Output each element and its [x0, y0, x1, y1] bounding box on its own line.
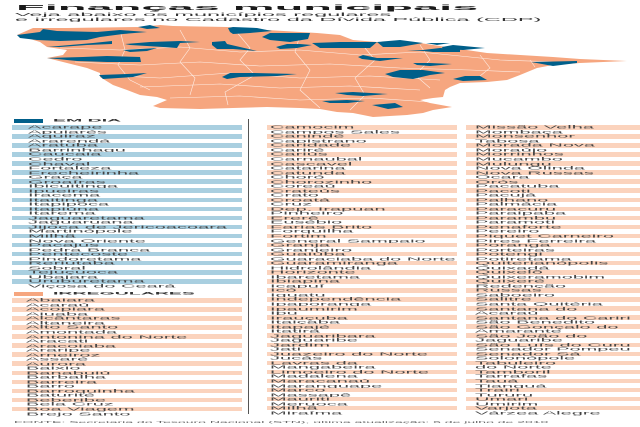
list: irregular municipalities, column 3: Piquet Carneiro — [475, 234, 614, 238]
list: irregular municipalities, column 2: Chorozinho — [270, 179, 372, 184]
list: irregular municipalities, column 2: Itatira — [270, 329, 320, 334]
list: irregular municipalities, column 3: Tururu — [475, 392, 533, 397]
list: irregular municipalities, column 2: Independência — [270, 297, 401, 302]
list: irregular municipalities, column 3: Nova Olinda — [475, 166, 585, 170]
list: irregular municipalities, column 3: Russas — [475, 288, 542, 293]
list: municipalities up to date: Jaguaretama — [28, 215, 145, 220]
list: irregular municipalities, column 2: Camocim — [270, 125, 354, 130]
list: irregular municipalities, column 1: Baixio — [26, 366, 80, 371]
list: irregular municipalities, column 3: Senador Pompeu — [475, 347, 631, 352]
list: irregular municipalities, column 2: Fortim — [270, 234, 327, 238]
list: irregular municipalities, column 2: Hidrolândia — [270, 265, 371, 270]
list: irregular municipalities, column 3: Morada Nova — [475, 143, 595, 148]
list: municipalities up to date: Caucaia — [28, 152, 101, 157]
list: irregular municipalities, column 3: Moraújo — [475, 148, 547, 152]
list: irregular municipalities, column 2: Milhã — [270, 406, 318, 411]
list: irregular municipalities, column 3: Quiterianópolis — [475, 261, 608, 266]
list: municipalities up to date: Jijoca de Jericoacoara — [28, 225, 227, 229]
list: irregular municipalities, column 2: Farias Brito — [270, 225, 372, 229]
list: municipalities up to date: Reriutaba — [28, 261, 115, 266]
title: Finanças municipais — [16, 3, 478, 11]
list: irregular municipalities, column 3: Nova Russas — [475, 170, 594, 175]
list: municipalities up to date: Frecheirinha — [28, 170, 139, 175]
list: irregular municipalities, column 1: Antonina do Norte — [26, 334, 187, 339]
list: municipalities up to date: Pindoretama — [28, 256, 141, 261]
list: irregular municipalities, column 3: Quixadá — [475, 265, 550, 270]
list: irregular municipalities, column 2: Ipaumirim — [270, 306, 358, 311]
list: municipalities up to date: Ipueiras — [28, 188, 99, 193]
list: irregular municipalities, column 2: Jardim — [270, 342, 330, 347]
list: irregular municipalities, column 3: Morrinhos — [475, 152, 564, 157]
list: irregular municipalities, column 2: Juazeiro do Norte — [270, 351, 428, 356]
list: irregular municipalities, column 1: Altaneira — [26, 321, 105, 325]
list: irregular municipalities, column 2: Jaguaribe — [270, 338, 358, 343]
list: irregular municipalities, column 3: Mombaça — [475, 129, 563, 134]
list: irregular municipalities, column 1: Bela Cruz — [26, 402, 114, 407]
list: irregular municipalities, column 1: Acaraú — [26, 302, 89, 307]
list: irregular municipalities, column 2: Carnaubal — [270, 157, 362, 161]
list: irregular municipalities, column 2: Forquilha — [270, 229, 353, 234]
list: irregular municipalities, column 1: Acopiara — [26, 307, 105, 312]
list: municipalities up to date: Graça — [28, 175, 82, 180]
list: municipalities up to date: Viçosa do Ceará — [28, 283, 176, 288]
list: irregular municipalities, column 2: Icó — [270, 288, 297, 293]
list: irregular municipalities, column 2: Croatá — [270, 197, 330, 202]
list: irregular municipalities, column 2: Cruz — [270, 202, 312, 207]
list: irregular municipalities, column 2: Meruoca — [270, 401, 348, 406]
list: irregular municipalities, column 2: Jucás — [270, 356, 322, 361]
list: irregular municipalities, column 1: Brejo Santo — [26, 411, 131, 416]
list: irregular municipalities, column 3: Santa Quitéria — [475, 302, 603, 306]
list: irregular municipalities, column 3: Redenção — [475, 283, 566, 288]
list: irregular municipalities, column 1: Boa Viagem — [26, 407, 135, 411]
list: irregular municipalities, column 1: Aurora — [26, 361, 86, 366]
list: irregular municipalities, column 1: Barreira — [26, 379, 97, 384]
map: municipalities up to date — [17, 25, 577, 109]
list: irregular municipalities, column 1: Aracoiaba — [26, 343, 116, 348]
list: irregular municipalities, column 2: Campos Sales — [270, 129, 400, 134]
list: irregular municipalities, column 3: Solonópole — [475, 356, 575, 361]
list: irregular municipalities, column 3: Pacatuba — [475, 184, 560, 189]
list: irregular municipalities, column 3: Tabosa — [475, 138, 540, 143]
list: irregular municipalities, column 2: Massapê — [270, 392, 351, 397]
list: municipalities up to date: Pentecoste — [28, 252, 128, 257]
list: municipalities up to date: Fortaleza — [28, 166, 111, 170]
legend: em dia: EM DIA — [53, 119, 121, 122]
list: irregular municipalities, column 3: Pacoti — [475, 188, 531, 193]
list: irregular municipalities, column 3: Pires Ferreira — [475, 238, 596, 243]
list: municipalities up to date: Itapiúna — [28, 206, 99, 211]
list: irregular municipalities, column 2: Cariré — [270, 148, 324, 152]
list: municipalities up to date: Cedro — [28, 157, 82, 161]
subtitle: Veja abaixo os municípios regulares — [15, 12, 391, 17]
list: irregular municipalities, column 3: Paracuru — [475, 206, 556, 211]
list: irregular municipalities, column 1: Alcântaras — [26, 316, 120, 321]
list: municipalities up to date: Itapipoca — [28, 202, 109, 207]
list: municipalities up to date: Ibicuitinga — [28, 184, 118, 189]
list: municipalities up to date: Pacajus — [28, 243, 99, 247]
list: irregular municipalities, column 3: Potiretama — [475, 256, 572, 261]
list: irregular municipalities, column 3: Paramoti — [475, 220, 555, 225]
list: irregular municipalities, column 3: Tianguá — [475, 383, 547, 388]
list: irregular municipalities, column 3: Tabuleiro — [475, 360, 556, 365]
list: irregular municipalities, column 2: Pinheiro — [270, 211, 343, 216]
list: municipalities up to date — [12, 125, 242, 288]
list: irregular municipalities, column 2: Ibaretama — [270, 274, 360, 279]
list: irregular municipalities, column 2: Catunda — [270, 170, 346, 175]
list: irregular municipalities, column 3: Pereiro — [475, 229, 539, 234]
list: municipalities up to date: Iracema — [28, 193, 100, 198]
list: municipalities up to date: Chaval — [28, 161, 90, 166]
list: irregular municipalities, column 3: Salitre — [475, 297, 532, 302]
list: irregular municipalities, column 3: Quixeramobim — [475, 274, 605, 279]
list: irregular municipalities, column 3: Penaforte — [475, 225, 562, 229]
list: irregular municipalities, column 3: Tauá — [475, 379, 518, 383]
list: municipalities up to date: Tejuçuoca — [28, 270, 118, 275]
list: irregular municipalities, column 2: Crateús — [270, 188, 340, 193]
list: irregular municipalities, column 1: Abaiara — [26, 298, 95, 303]
list: irregular municipalities, column 2: Cascavel — [270, 161, 352, 166]
list: irregular municipalities, column 2: Mauriti — [270, 397, 330, 402]
list: irregular municipalities, column 2: Granja — [270, 243, 330, 247]
list: municipalities up to date: Itarema — [28, 211, 96, 216]
list: irregular municipalities, column 3: São Luís do Curu — [475, 342, 631, 347]
list: municipalities up to date: Ararendá — [28, 138, 110, 143]
list: irregular municipalities, column 3: Quixelô — [475, 270, 543, 275]
list: irregular municipalities, column 2: Choró — [270, 175, 324, 180]
list: irregular municipalities, column 2: General Sampaio — [270, 238, 426, 243]
list: municipalities up to date: Ubajara — [28, 274, 98, 279]
list: irregular municipalities, column 3: Missão Velha — [475, 125, 594, 130]
list: irregular municipalities, column 2: Horizonte — [270, 270, 356, 275]
list: irregular municipalities, column 1: Assaré — [26, 357, 88, 362]
list: irregular municipalities, column 2: Jaguaribara — [270, 333, 376, 338]
list: municipalities up to date: Jaguaruana — [28, 220, 134, 225]
list: irregular municipalities, column 2: Ipu — [270, 311, 298, 315]
list: irregular municipalities, column 3: São João do — [475, 333, 587, 338]
list: irregular municipalities, column 3: Paraipaba — [475, 211, 566, 216]
list: irregular municipalities, column 3: Jaguaribe — [475, 338, 563, 343]
list: municipalities up to date: Pedra Branca — [28, 247, 150, 252]
map: irregular area — [17, 25, 627, 117]
list: irregular municipalities, column 2: Icapuí — [270, 283, 324, 288]
subtitle line 2: e irregulares no Cadastro da Dívida Pública (CDP) — [15, 17, 541, 22]
list: irregular municipalities, column 2: Iguatu — [270, 293, 326, 297]
list: irregular municipalities, column 2: Capistrano — [270, 138, 367, 143]
list: irregular municipalities, column 3: Parambu — [475, 215, 556, 220]
list: irregular municipalities, column 2: Maracanaú — [270, 379, 370, 383]
list: irregular municipalities, column 2: Marco — [270, 388, 326, 392]
map: municipality borders — [60, 30, 560, 110]
list: irregular municipalities, column 1: Arneiroz — [26, 352, 100, 357]
list: irregular municipalities, column 3: Ocara — [475, 175, 529, 180]
list: irregular municipalities, column 3: Senador Sá — [475, 351, 581, 356]
list: municipalities up to date: Sobral — [28, 265, 86, 270]
list: irregular municipalities, column 2: Ererê — [270, 215, 319, 220]
list: municipalities up to date: Uruburetama — [28, 279, 145, 284]
list: irregular municipalities, column 1: Barbalha — [26, 375, 106, 380]
list: irregular municipalities, column 2: Caridade — [270, 143, 351, 148]
list: irregular municipalities, column 2: Limoeiro do Norte — [270, 370, 429, 374]
legend: irregulares: IRREGULARES — [53, 292, 195, 296]
list: irregular municipalities, column 1 — [12, 298, 242, 416]
list: irregular municipalities, column 2: Coreaú — [270, 184, 336, 189]
list: irregular municipalities, column 2: Dep. Irapuan — [270, 206, 386, 211]
list: irregular municipalities, column 2 — [267, 125, 457, 415]
list: irregular municipalities, column 1: Aiuaba — [26, 311, 88, 316]
list: irregular municipalities, column 1: Barro — [26, 384, 75, 389]
list: irregular municipalities, column 3: São Gonçalo do — [475, 324, 618, 329]
list: irregular municipalities, column 2: Ipaporanga — [270, 302, 371, 306]
list: irregular municipalities, column 2: Lavras da — [270, 360, 358, 365]
list: irregular municipalities, column 3: Quixeré — [475, 279, 545, 284]
list: irregular municipalities, column 1: Aracati — [26, 339, 88, 343]
list: irregular municipalities, column 3: Acaraú — [475, 311, 538, 315]
list: irregular municipalities, column 2: Maranguape — [270, 383, 382, 388]
list: irregular municipalities, column 3: Santana do Cariri — [475, 315, 631, 320]
list: irregular municipalities, column 3: Várzea Alegre — [475, 410, 601, 415]
list: irregular municipalities, column 2: Irauçuba — [270, 315, 348, 320]
list: irregular municipalities, column 3: Mulungu — [475, 161, 552, 166]
list: municipalities up to date: Martinópole — [28, 229, 133, 234]
list: irregular municipalities, column 2: Jati — [270, 347, 301, 352]
list: irregular municipalities, column 3: Umari — [475, 397, 528, 402]
legend: em dia — [14, 119, 121, 123]
list: municipalities up to date: Aratuba — [28, 143, 98, 148]
list: irregular municipalities, column 3: Orós — [475, 179, 518, 184]
list: irregular municipalities, column 3: Palhano — [475, 197, 548, 202]
list: irregular municipalities, column 2: Granjeiro — [270, 247, 352, 252]
list: irregular municipalities, column 1: Amontada — [26, 330, 117, 334]
map of Ceará municipalities — [17, 25, 626, 117]
vertical divider — [248, 119, 249, 414]
list: municipalities up to date: Aquiraz — [28, 134, 96, 139]
list: irregular municipalities, column 3: do Norte — [475, 365, 552, 370]
list: municipalities up to date: Itaitinga — [28, 197, 98, 202]
list: irregular municipalities, column 2: Guaramiranga — [270, 261, 398, 266]
list: irregular municipalities, column 2: Canindé — [270, 134, 345, 139]
list: irregular municipalities, column 2: Itaiçaba — [270, 320, 340, 325]
list: irregular municipalities, column 2: Guaiúba — [270, 252, 346, 257]
list: irregular municipalities, column 3: Mucambo — [475, 157, 563, 161]
source footer: FONTE: Secretaria do Tesouro Nacional (STN), última atualização: 6 de julho de 2010 — [14, 420, 548, 423]
list: irregular municipalities, column 1: Banabuiú — [26, 370, 111, 375]
list: irregular municipalities, column 2: Ibiapina — [270, 279, 340, 284]
list: irregular municipalities, column 1: Alto Santo — [26, 325, 118, 330]
list: irregular municipalities, column 3: Tarrafas — [475, 374, 547, 379]
list: irregular municipalities, column 1: Beberibe — [26, 398, 106, 402]
list: irregular municipalities, column 2: Mangabeira — [270, 365, 376, 370]
list: irregular municipalities, column 2: Crato — [270, 193, 319, 198]
list: irregular municipalities, column 2: Madalena — [270, 374, 358, 379]
list: irregular municipalities, column 3: Tamboril — [475, 370, 551, 374]
list: irregular municipalities, column 3: Poranga — [475, 243, 551, 247]
list: municipalities up to date: Acarape — [28, 125, 102, 130]
list: irregular municipalities, column 3: Palmácia — [475, 202, 557, 207]
list: irregular municipalities, column 2: Eusébio — [270, 220, 342, 225]
list: irregular municipalities, column 3: Pacujá — [475, 193, 536, 198]
list: irregular municipalities, column 3: Amarante — [475, 329, 562, 334]
list: irregular municipalities, column 2: Miraíma — [270, 410, 342, 415]
list: irregular municipalities, column 3: Saboeiro — [475, 293, 555, 297]
list: irregular municipalities, column 3: Monsenhor — [475, 134, 575, 139]
list: irregular municipalities, column 1: Araripe — [26, 348, 90, 353]
list: irregular municipalities, column 3: Varjota — [475, 406, 537, 411]
list: irregular municipalities, column 3: Porteiras — [475, 247, 555, 252]
list: irregular municipalities, column 2: Itapajé — [270, 324, 330, 329]
list: irregular municipalities, column 1: Baturité — [26, 393, 95, 398]
list: irregular municipalities, column 3: Potengi — [475, 252, 543, 257]
list: municipalities up to date: Apuiarés — [28, 129, 107, 134]
list: irregular municipalities, column 3: Trairi — [475, 388, 520, 392]
list: municipalities up to date: Nova Oriente — [28, 238, 146, 243]
list: irregular municipalities, column 3 — [466, 125, 640, 416]
list: irregular municipalities, column 3: São Benedito — [475, 320, 595, 325]
list: irregular municipalities, column 2: Cariús — [270, 152, 328, 157]
list: irregular municipalities, column 2: Catarina — [270, 166, 346, 170]
list: municipalities up to date: Groaíras — [28, 179, 106, 184]
list: irregular municipalities, column 1: Barroquinha — [26, 388, 135, 393]
list: irregular municipalities, column 3: Santana do — [475, 306, 577, 311]
list: irregular municipalities, column 2: Guaraciaba do Norte — [270, 256, 456, 261]
list: irregular municipalities, column 3: Umirim — [475, 401, 538, 406]
list: municipalities up to date: Milhã — [28, 234, 76, 238]
list: municipalities up to date: Barrinhagu — [28, 148, 126, 152]
